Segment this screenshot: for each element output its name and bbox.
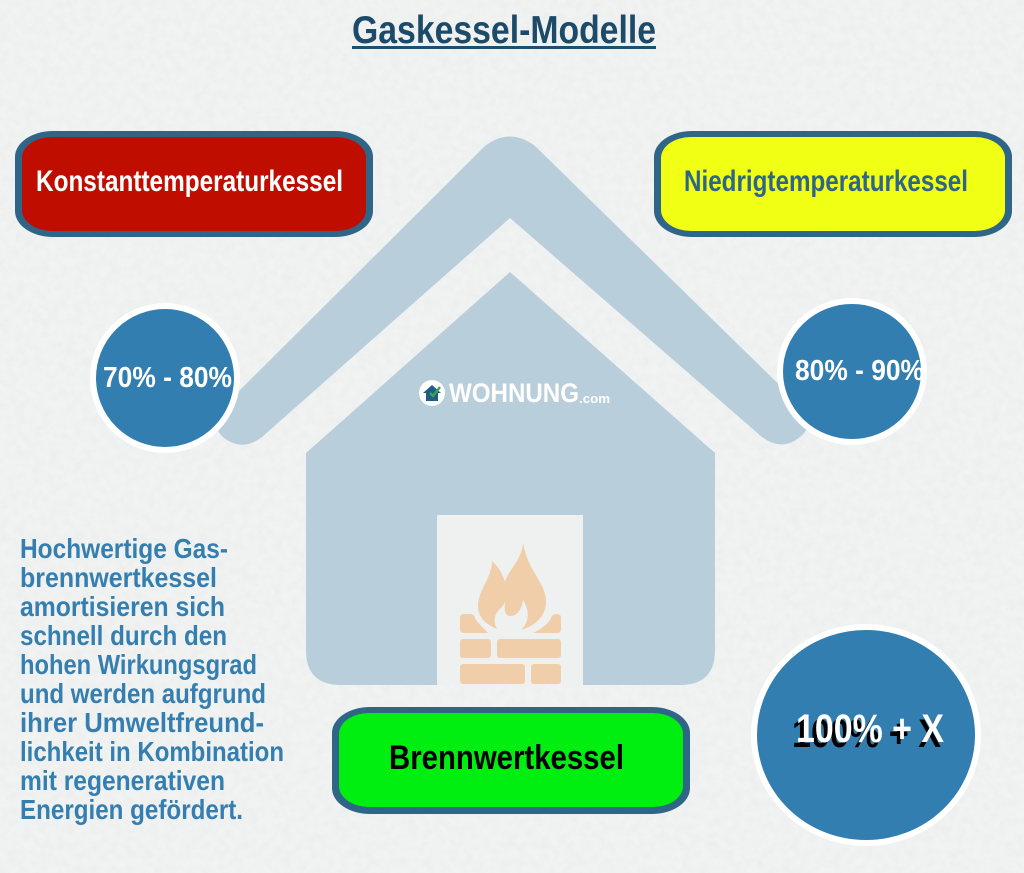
- circle: 80% - 90%: [780, 301, 924, 442]
- circle: 100% + X: [754, 627, 978, 843]
- text block: description: brennwertkessel: [20, 562, 217, 593]
- circle: 70% - 80%: [93, 306, 237, 450]
- icon: flame on bricks: [460, 543, 561, 684]
- text block: description: [20, 533, 284, 825]
- fireplace opening: [437, 515, 583, 685]
- logo: WOHNUNG.com: WOHNUNG: [449, 378, 579, 408]
- house body: [306, 272, 715, 685]
- text block: description: mit regenerativen: [20, 765, 225, 796]
- logo: WOHNUNG.com: .com: [579, 391, 610, 406]
- text block: description: Hochwertige Gas-: [20, 533, 228, 564]
- icon: logo house: [419, 380, 445, 406]
- text block: description: und werden aufgrund: [20, 678, 266, 709]
- circle: 80% - 90%: 80% - 90%: [795, 355, 924, 387]
- text block: description: lichkeit in Kombination: [20, 736, 284, 767]
- panel: Konstanttemperaturkessel: [15, 131, 373, 237]
- panel: Brennwertkessel: Brennwertkessel: [389, 739, 624, 777]
- circle: 100% + X: 100% + X: [792, 712, 941, 756]
- text block: description: Energien gefördert.: [20, 794, 243, 825]
- panel: Brennwertkessel: [332, 707, 690, 814]
- text block: description: ihrer Umweltfreund-: [20, 707, 264, 738]
- panel: Niedrigtemperaturkessel: [654, 131, 1012, 237]
- house roof: [216, 136, 808, 445]
- title: Gaskessel-Modelle: [352, 9, 656, 52]
- text block: description: hohen Wirkungsgrad: [20, 649, 257, 680]
- circle: 70% - 80%: 70% - 80%: [103, 362, 232, 394]
- text block: description: amortisieren sich: [20, 591, 225, 622]
- text block: description: schnell durch den: [20, 620, 227, 651]
- panel: Konstanttemperaturkessel: Konstanttemperaturkessel: [36, 165, 343, 198]
- house illustration: [216, 136, 808, 685]
- circle: 100% + X: 100% + X: [796, 707, 944, 751]
